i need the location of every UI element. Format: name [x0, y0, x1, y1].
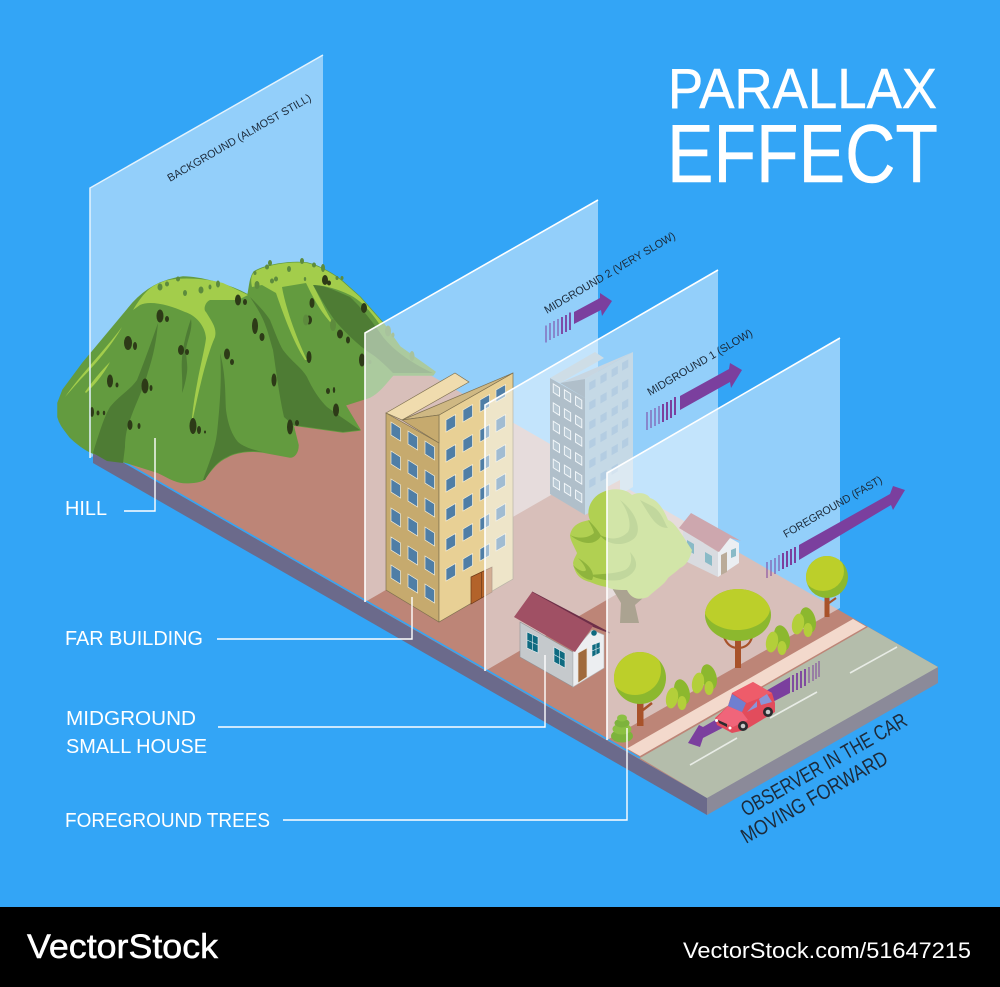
- road and sidewalk: [627, 619, 938, 798]
- label: foreground: FOREGROUND (FAST): [782, 474, 884, 541]
- illustration: large tree: [570, 489, 692, 623]
- illustration: green hill: [58, 258, 435, 483]
- large tree: leaf shading: [570, 500, 668, 581]
- far building: door: [471, 567, 492, 604]
- arrow: midground 1 direction: [647, 363, 742, 430]
- footer: logo: VectorStock: [27, 928, 219, 966]
- illustration: red car: [715, 682, 775, 733]
- illustration: midground small house: [514, 592, 610, 687]
- label: observer in the car: MOVING FORWARD: [737, 747, 892, 848]
- illustration: small conical bush: [611, 714, 633, 742]
- isometric platform base: [93, 314, 938, 815]
- arrow: foreground direction: [767, 486, 905, 578]
- label: midground 2: MIDGROUND 2 (VERY SLOW): [542, 230, 678, 317]
- label: foreground trees: FOREGROUND TREES: [65, 810, 270, 832]
- illustration: shrubs: [664, 606, 819, 710]
- panel: midground 1 plane: [485, 270, 718, 671]
- car: wheels: [738, 707, 773, 731]
- far building: windows: [391, 384, 506, 603]
- title: [667, 57, 938, 200]
- footer: image id: VectorStock.com/51647215: [683, 938, 971, 963]
- label: far building: FAR BUILDING: [65, 628, 203, 650]
- illustration: distant small house: [679, 513, 741, 577]
- label: midground small house: SMALL HOUSE: [66, 736, 207, 758]
- label: hill: HILL: [65, 498, 107, 520]
- title: EFFECT: [667, 107, 938, 200]
- arrow: road direction: [688, 661, 819, 747]
- illustration: foreground tree two: [704, 586, 771, 668]
- illustration: far tan building: [386, 373, 513, 622]
- hill: light shrubs: [158, 258, 414, 364]
- label: midground small house: MIDGROUND: [66, 708, 196, 730]
- hill: dark shrubs: [90, 275, 367, 434]
- leader lines: [124, 438, 627, 820]
- illustration: distant building: [550, 352, 633, 515]
- panel: background plane edge: [90, 55, 323, 458]
- panel: background plane: [90, 55, 323, 458]
- illustration: foreground tree three: [806, 556, 848, 617]
- label: observer in the car: OBSERVER IN THE CAR: [737, 709, 911, 821]
- footer bar: [0, 907, 1000, 987]
- small house: windows and door: [527, 632, 600, 668]
- illustration: foreground tree one: [614, 652, 666, 726]
- title: PARALLAX: [668, 57, 937, 121]
- panel: midground 2 plane: [365, 200, 598, 602]
- label: midground small house: [66, 708, 207, 758]
- panel: foreground plane: [607, 338, 840, 740]
- label: background plane: BACKGROUND (ALMOST STILL): [166, 92, 314, 185]
- label: midground 1: MIDGROUND 1 (SLOW): [645, 327, 755, 399]
- arrow: midground 2 direction: [546, 293, 612, 342]
